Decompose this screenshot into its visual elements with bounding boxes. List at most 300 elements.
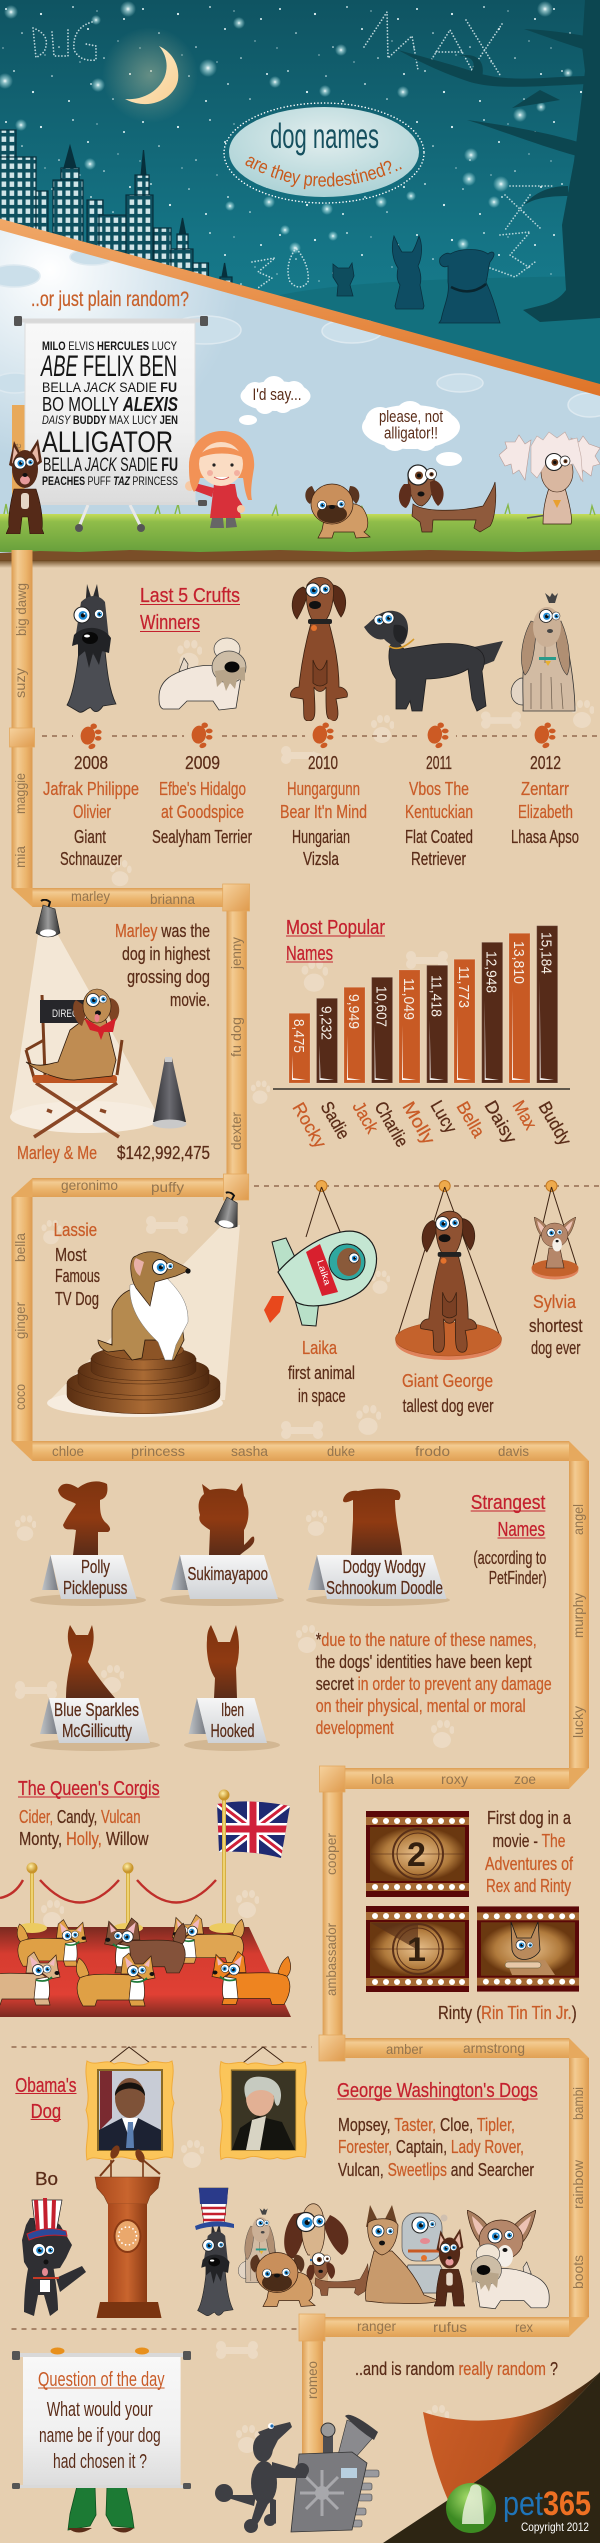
- dog: giant schnauzer: [67, 584, 116, 712]
- heading: The Queen's Corgis: [18, 1778, 160, 1800]
- page curl with logo: [383, 2372, 600, 2543]
- bar values: 9,232: [318, 1006, 334, 1040]
- bar labels: Sadie: [317, 1098, 354, 1143]
- title: dog names: dog names: [270, 117, 379, 156]
- spotlight lamp: [36, 900, 60, 937]
- corgi: back left: [17, 1920, 86, 1966]
- machine spout coil: [321, 2415, 378, 2458]
- portrait: Washington: [220, 2062, 307, 2159]
- pipe labels: rufus: [433, 2319, 467, 2335]
- section: Lassie: [47, 1180, 600, 1417]
- section: most popular names chart: [273, 917, 575, 1151]
- winner 2009: at Goodspice: [161, 802, 244, 822]
- dog: dachshund: [399, 465, 496, 532]
- signpost: movie: movie: [13, 443, 24, 470]
- pipe labels: lola: [371, 1771, 394, 1787]
- pipe labels: bambi: [570, 2087, 586, 2120]
- pipe corners: [12, 888, 589, 2337]
- placard: Dodgy Wodgy: Schnookum Doodle: [326, 1578, 443, 1598]
- caption: Marley and Me gross: [17, 1143, 210, 1163]
- placard: Blue Sparkles: Blue Sparkles: [54, 1700, 139, 1720]
- grass: [0, 514, 600, 552]
- glowing stars: [0, 1, 573, 254]
- skyline buildings: [0, 130, 232, 297]
- note about identities: on their physical, mental or moral: [316, 1696, 526, 1716]
- heading: or just plain random: ..or just plain random?: [31, 288, 189, 311]
- pipe labels: suzy: [12, 668, 28, 698]
- winner 2010: Hungargunn: [287, 779, 360, 799]
- caption: Laika: in space: [298, 1386, 346, 1406]
- dog: pug: [305, 484, 370, 538]
- pipe labels: rex: [515, 2319, 533, 2335]
- dog: shepherd: [365, 2205, 440, 2304]
- heading: Strangest Names: [471, 1492, 547, 1588]
- corgi: front middle: [76, 1953, 155, 2006]
- film frame: 1: 1: [407, 1931, 426, 1969]
- name machine: [291, 2415, 379, 2532]
- section: presidents' dogs: [12, 2047, 549, 2318]
- sign paper: [23, 2356, 181, 2486]
- label: Bo: Bo: [35, 2169, 58, 2189]
- winner 2011: 2011: [426, 753, 452, 773]
- caption: Giant George: Giant George: [402, 1371, 493, 1391]
- constellation: DUG: [33, 22, 96, 60]
- speech cloud: please not alligator: [362, 401, 462, 466]
- board wheels: [75, 524, 145, 532]
- heading: Strangest Names: (according to: [473, 1548, 546, 1568]
- pipe labels: armstrong: [463, 2040, 525, 2056]
- caption: Laika: [288, 1338, 355, 1406]
- machine side tubes: [352, 2470, 379, 2527]
- Washington dog names: Vulcan, Sweetlips and Searcher: [338, 2160, 534, 2180]
- spotlight pool: [10, 1101, 162, 1133]
- note about identities: [316, 1630, 552, 1738]
- bar values: 13,810: [510, 941, 527, 984]
- rocket ropes: [306, 1187, 341, 1237]
- pipe labels: cooper: [323, 1833, 339, 1875]
- pipe labels: big dawg: [13, 583, 29, 636]
- corgi: brown: [105, 1918, 186, 1973]
- chair back: [40, 1000, 84, 1023]
- bar labels: Jack: [349, 1098, 383, 1137]
- director chair: [26, 995, 122, 1137]
- Washington dog names: Forester, Captain, Lady Rover,: [338, 2137, 524, 2157]
- silhouette: Blue Sparkles: [66, 1625, 115, 1698]
- diagonal orange band: [0, 219, 600, 396]
- rocket: Laika: Laika: [315, 1259, 333, 1286]
- winner 2008: Schnauzer: [60, 849, 122, 869]
- dashed hanging line: [12, 2046, 312, 2048]
- pipe labels: geronimo: [61, 1177, 118, 1193]
- copyright: Copyright 2012: [521, 2520, 589, 2534]
- silhouette: Iben Hooked: [207, 1625, 239, 1698]
- caption: Marley and Me gross: $142,992,475: [117, 1143, 210, 1163]
- pipe labels: bella: [12, 1233, 28, 1262]
- winner 2012: Zentarr: [521, 779, 569, 799]
- dog: beagle: [284, 2204, 348, 2284]
- pipe labels: amber: [386, 2041, 423, 2057]
- text: first dog in a movie: Adventures of: [485, 1854, 574, 1874]
- word cloud of names: BO MOLLY ALEXIS: [42, 394, 178, 416]
- brass posts: [17, 1790, 239, 1933]
- text: Marley was the dog: grossing dog: [127, 967, 210, 987]
- dog: Lassie collie: [98, 1252, 191, 1360]
- dog: chinese crested: [499, 432, 600, 524]
- text: Marley was the dog: dog in highest: [122, 944, 210, 964]
- name board: [14, 316, 208, 532]
- timeline paws: [73, 718, 563, 754]
- bar values: 9,949: [345, 994, 362, 1029]
- pins: [316, 1180, 557, 1192]
- logo: pet365: [446, 2483, 591, 2533]
- legs holding sign: [68, 2486, 134, 2532]
- text: Marley was the dog: Marley was the: [115, 921, 210, 941]
- pipe labels: brianna: [150, 891, 195, 907]
- film frame: 1: [366, 1906, 469, 1992]
- dog: lhasa apso: [511, 593, 575, 711]
- pipe of dog names: [10, 550, 589, 2457]
- pipe labels: angel: [570, 1504, 586, 1535]
- silhouette: pointy-eared dog: [392, 236, 424, 309]
- winner 2009: [152, 753, 252, 847]
- caption: Giant George: tallest dog ever: [403, 1396, 494, 1416]
- pipe labels: lucky: [570, 1706, 586, 1738]
- red carpet: [0, 1927, 291, 2017]
- caption: Laika: Laika: [302, 1338, 338, 1358]
- bare tree: [398, 0, 600, 322]
- dashed hanging line: [254, 1185, 600, 1187]
- note about identities: development: [316, 1718, 394, 1738]
- constellation: BO: [252, 248, 308, 288]
- caption: Giant George: [402, 1371, 494, 1416]
- bars: [289, 926, 558, 1083]
- heading: [286, 917, 385, 965]
- winner 2010: Bear It'n Mind: [280, 802, 367, 822]
- pipe labels: coco: [12, 1384, 28, 1410]
- text: first dog in a movie: First dog in a: [487, 1808, 572, 1828]
- bar labels: Daisy: [481, 1097, 521, 1147]
- bar values: 11,773: [455, 966, 472, 1008]
- winner 2010: [280, 753, 367, 869]
- heading: Strangest Names: Names: [498, 1519, 545, 1541]
- machine body: [291, 2452, 367, 2532]
- pipe labels: ginger: [12, 1302, 28, 1339]
- placard: Blue Sparkles: [30, 1698, 160, 1751]
- word cloud of names: BELLA JACK SADIE FU: [43, 455, 178, 476]
- section: first dog in a movie: [366, 1808, 579, 2023]
- panel: night sky hero: [0, 0, 600, 384]
- bar labels: Max: [509, 1097, 541, 1133]
- section: strangest names: [30, 1481, 552, 1751]
- pipe labels: fu dog: [228, 1017, 244, 1057]
- bar shine: [292, 980, 554, 1080]
- text: first dog in a movie: [485, 1808, 574, 1896]
- spotlight lamp: [214, 1191, 244, 1230]
- section: Marley: [10, 900, 210, 1163]
- heading: Most Popular: [286, 917, 385, 939]
- silhouette: Sukimayapoo: [199, 1483, 254, 1555]
- pipe labels: davis: [498, 1443, 529, 1459]
- bar labels: Charlie: [371, 1098, 412, 1150]
- placard: Blue Sparkles: McGillicutty: [62, 1721, 132, 1741]
- winner 2010: Vizsla: [303, 849, 340, 869]
- word cloud of names: [40, 339, 178, 488]
- title bubble: are they predestined?..: [246, 156, 402, 190]
- spotlight beam: [50, 1225, 240, 1400]
- question sign: [12, 2348, 191, 2489]
- sky background: [0, 0, 600, 396]
- Washington dog names: Mopsey, Taster, Cloe, Tipler,: [338, 2115, 515, 2135]
- curled page flap: [423, 2372, 600, 2500]
- placard: Sukimayapoo: [160, 1555, 284, 1606]
- heading: Question of the day: Question of the day: [38, 2369, 165, 2391]
- corgi: orange: [212, 1952, 291, 2004]
- question text: What would your: [47, 2399, 153, 2421]
- bar values: 11,418: [428, 975, 445, 1017]
- pipe labels: marley: [71, 888, 110, 904]
- pipe labels: [12, 583, 586, 2399]
- chart axis: [273, 1088, 570, 1090]
- title bubble: [223, 102, 425, 204]
- dog: flat coated retriever: [364, 611, 503, 711]
- hanging plate: Sylvia: [532, 1187, 578, 1280]
- caption: Sylvia: [529, 1292, 582, 1358]
- winner 2008: 2008: [74, 753, 108, 773]
- winner 2011: Flat Coated: [405, 827, 473, 847]
- winner 2011: [405, 753, 473, 869]
- moon: [102, 27, 198, 123]
- film frame: Rinty: [477, 1906, 579, 1992]
- pipe labels: murphy: [570, 1593, 586, 1638]
- word cloud of names: ABE FELIX BEN: [40, 350, 177, 383]
- pipe segments: [12, 550, 589, 2457]
- hill: [275, 276, 600, 396]
- closing text: ..and is random really random ?: [355, 2359, 558, 2379]
- caption: Sylvia: dog ever: [531, 1338, 580, 1358]
- dog: doberman: [434, 2229, 465, 2306]
- bar values: 8,475: [290, 1019, 307, 1053]
- dog: Bo: [22, 2198, 86, 2316]
- board rods: [16, 318, 206, 505]
- question text: [39, 2399, 161, 2473]
- heading: Last 5 Crufts Winners: Last 5 Crufts: [140, 585, 240, 607]
- ground shadow: [0, 560, 600, 568]
- corgi names: [19, 1807, 149, 1849]
- constellation: MAX: [364, 12, 502, 75]
- heading: Obama's Dog: Obama's: [15, 2075, 77, 2097]
- ground: [0, 550, 600, 561]
- placard: Dodgy Wodgy: Dodgy Wodgy: [342, 1557, 426, 1577]
- caption: Marley and Me gross: Marley & Me: [17, 1143, 97, 1163]
- section: Queen's corgis: [0, 1778, 293, 2017]
- sign clips: [50, 2348, 149, 2354]
- pipe labels: zoe: [514, 1771, 536, 1787]
- portrait: Obama: [86, 2061, 174, 2160]
- text: Lassie: Most: [55, 1245, 86, 1265]
- silhouette: Dodgy Wodgy: [343, 1489, 402, 1555]
- text: Marley was the dog: [115, 921, 210, 1010]
- bar values: 15,184: [538, 932, 555, 974]
- dog: bulldog: [402, 2213, 448, 2293]
- note about identities: *due to the nature of these names,: [316, 1630, 537, 1650]
- panel: daytime scene: [0, 219, 600, 568]
- text: first dog in a movie: Rex and Rinty: [486, 1876, 571, 1896]
- dog: sealyham terrier: [159, 638, 246, 710]
- section: Crufts winners: [42, 578, 600, 869]
- winner 2008: Giant: [74, 827, 106, 847]
- heading: Strangest Names: Strangest: [471, 1492, 546, 1514]
- ropes: [0, 1880, 216, 1902]
- winner 2009: Sealyham Terrier: [152, 827, 252, 847]
- chair back: DIREC: [52, 1008, 78, 1020]
- text: first dog in a movie: movie - The: [492, 1831, 566, 1851]
- pipe labels: duke: [327, 1443, 355, 1459]
- Washington dog names: [338, 2115, 534, 2180]
- grass tufts: [4, 504, 595, 516]
- corgi names: Cider, Candy, Vulcan: [19, 1807, 140, 1827]
- pipe labels: sasha: [231, 1443, 268, 1459]
- pipe labels: boots: [570, 2255, 586, 2289]
- placard: Iben Hooked: [184, 1698, 280, 1751]
- frame hanger wires: [105, 2047, 288, 2066]
- dog: lhasa apso: [238, 2208, 278, 2282]
- placard: Polly Picklepuss: [30, 1555, 146, 1606]
- corgi: front left: [0, 1952, 60, 2005]
- clouds: [0, 249, 600, 417]
- winner 2009: Efbe's Hidalgo: [159, 779, 246, 799]
- winner 2009: 2009: [185, 753, 220, 773]
- winner 2012: 2012: [530, 753, 561, 773]
- pipe labels: chloe: [52, 1443, 84, 1459]
- speech cloud: please not alligator: alligator!!: [384, 424, 438, 442]
- silhouette: pug: [439, 250, 500, 323]
- flag: [217, 1801, 290, 1858]
- spotlight pool: [47, 1389, 223, 1417]
- pipe labels: princess: [131, 1443, 185, 1459]
- pipe labels: jenny: [228, 937, 244, 970]
- bar labels: Buddy: [535, 1098, 575, 1149]
- bar labels: Lucy: [427, 1097, 461, 1136]
- placard: Iben Hooked: Hooked: [210, 1721, 254, 1741]
- board legs: [79, 505, 141, 527]
- word cloud of names: BELLA JACK SADIE FU: [42, 379, 177, 395]
- silhouette: small dog: [333, 263, 354, 296]
- bar labels: Molly: [399, 1098, 439, 1148]
- pipe joints: [10, 728, 345, 2341]
- daytime sky: [0, 224, 600, 560]
- bar values: [290, 932, 555, 1053]
- heading: Obama's Dog: Dog: [31, 2101, 61, 2123]
- dog: poodle: [215, 2422, 309, 2533]
- pedestal: [67, 1340, 220, 1414]
- dog pack: [195, 2188, 549, 2316]
- caption: Sylvia: shortest: [529, 1316, 582, 1336]
- pipe labels: maggie: [12, 773, 28, 814]
- dog: Marley: [26, 989, 119, 1080]
- bar labels: Bella: [453, 1098, 489, 1142]
- winner 2008: Olivier: [73, 802, 111, 822]
- heading: Strangest Names: PetFinder): [489, 1568, 547, 1588]
- caption: Sylvia: Sylvia: [533, 1292, 577, 1312]
- dog: left brown: [6, 439, 44, 534]
- heading: Last 5 Crufts Winners: Winners: [140, 612, 200, 634]
- signpost: movie: [12, 405, 25, 503]
- winner 2008: [43, 753, 139, 869]
- tiny stars: [0, 0, 600, 396]
- pipe labels: romeo: [304, 2361, 320, 2399]
- pipe labels: ambassador: [323, 1923, 339, 1996]
- silhouette: Polly Picklepuss: [58, 1481, 110, 1555]
- winner 2011: Retriever: [411, 849, 466, 869]
- question text: had chosen it ?: [53, 2451, 147, 2473]
- dog: schnauzer in hat: [195, 2188, 234, 2316]
- dog: pug: [250, 2252, 315, 2306]
- bar values: 10,607: [373, 986, 390, 1027]
- film frame: 2: [366, 1811, 469, 1897]
- note about identities: the dogs' identities have been kept: [316, 1652, 532, 1672]
- pipe labels: rainbow: [570, 2159, 586, 2209]
- speech cloud: please not alligator: please, not: [379, 407, 443, 426]
- dog: dachshund: [307, 2253, 368, 2296]
- dog: Giant George: [420, 1211, 476, 1352]
- section: question of the day: [12, 2329, 558, 2533]
- winner 2012: [511, 753, 579, 847]
- word cloud of names: PEACHES PUFF TAZ PRINCESS: [42, 474, 178, 488]
- dog: chihuahua: [467, 2210, 536, 2267]
- caption: Rinty: Rinty (Rin Tin Tin Jr.): [438, 2003, 577, 2023]
- pipe labels: mia: [12, 846, 28, 868]
- background pattern: paws and bones: [15, 640, 594, 2453]
- bar labels: Rocky: [289, 1099, 330, 1151]
- placard: Dodgy Wodgy: [306, 1555, 450, 1606]
- dog: sealyham: [471, 2244, 549, 2309]
- placard: Iben Hooked: Iben: [221, 1700, 244, 1720]
- placard: Polly Picklepuss: Picklepuss: [63, 1578, 127, 1598]
- word cloud of names: MILO ELVIS HERCULES LUCY: [42, 339, 177, 353]
- dog: Sylvia: [534, 1217, 576, 1268]
- placard: Polly Picklepuss: Polly: [81, 1557, 110, 1577]
- heading: Obama's Dog: [15, 2075, 77, 2123]
- caption: Laika: first animal: [288, 1363, 355, 1383]
- board end caps: [14, 316, 208, 506]
- sign caps: [12, 2351, 191, 2489]
- bar values: 12,948: [483, 951, 500, 993]
- girl: [185, 431, 254, 528]
- bar chart: [273, 926, 575, 1151]
- hanging plate: Giant George: [396, 1187, 502, 1360]
- bar values: 11,049: [400, 978, 417, 1020]
- text: Lassie: Lassie: [54, 1220, 97, 1240]
- text: Lassie: TV Dog: [55, 1289, 99, 1309]
- word cloud of names: DAISY BUDDY MAX LUCY JEN: [42, 413, 178, 427]
- note about identities: secret in order to prevent any damage: [316, 1674, 552, 1694]
- board paper: [25, 323, 195, 503]
- winner 2011: Kentuckian: [405, 802, 473, 822]
- bar labels: [289, 1097, 575, 1151]
- winner 2012: Elizabeth: [518, 802, 573, 822]
- corgi: back right: [172, 1915, 244, 1963]
- winner 2010: Hungarian: [292, 827, 350, 847]
- word cloud of names: ALLIGATOR: [42, 426, 173, 459]
- text: Lassie: Famous: [55, 1266, 100, 1286]
- dashed divider: [12, 2328, 298, 2330]
- question text: name be if your dog: [39, 2425, 161, 2447]
- constellation: right: [490, 186, 552, 277]
- text: Marley was the dog: movie.: [170, 990, 210, 1010]
- pipe labels: roxy: [441, 1771, 468, 1787]
- rocket: Laika: [264, 1231, 377, 1326]
- sign rods: [14, 2353, 189, 2488]
